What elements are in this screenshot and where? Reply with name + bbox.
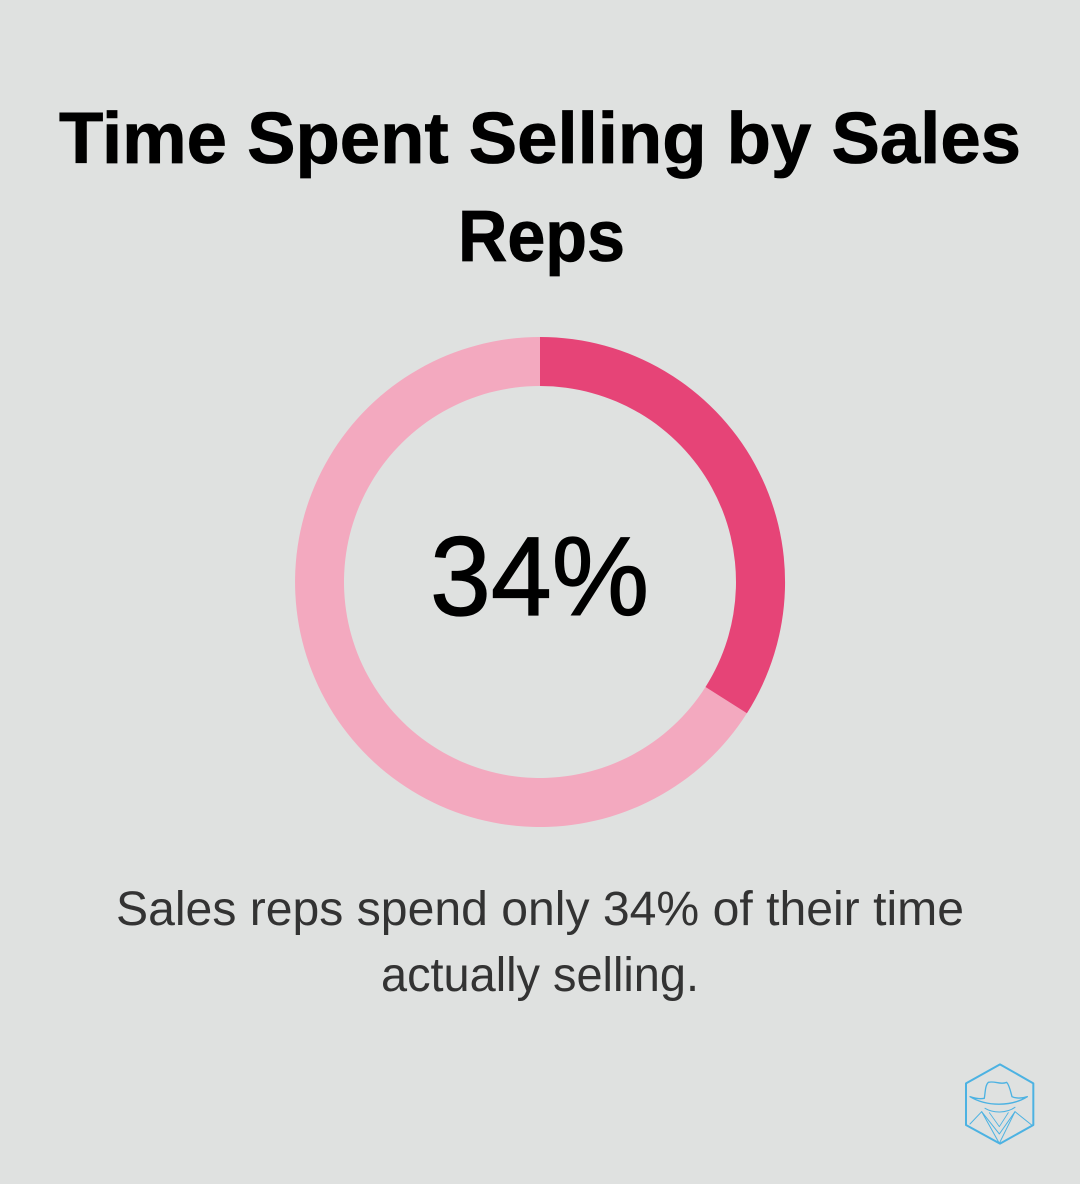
donut highlighted segment xyxy=(540,337,785,713)
description text xyxy=(116,883,964,1002)
icon: hexagon spy logo xyxy=(966,1064,1033,1144)
title xyxy=(59,99,1021,277)
donut chart: 34% of time selling xyxy=(295,337,785,827)
description text: actually selling. xyxy=(381,949,699,1002)
center value: 34% xyxy=(430,514,649,639)
title: Time Spent Selling by Sales xyxy=(59,99,1021,179)
donut remainder segment xyxy=(295,337,747,827)
description text: Sales reps spend only 34% of their time xyxy=(116,883,964,936)
title: Reps xyxy=(458,197,625,277)
